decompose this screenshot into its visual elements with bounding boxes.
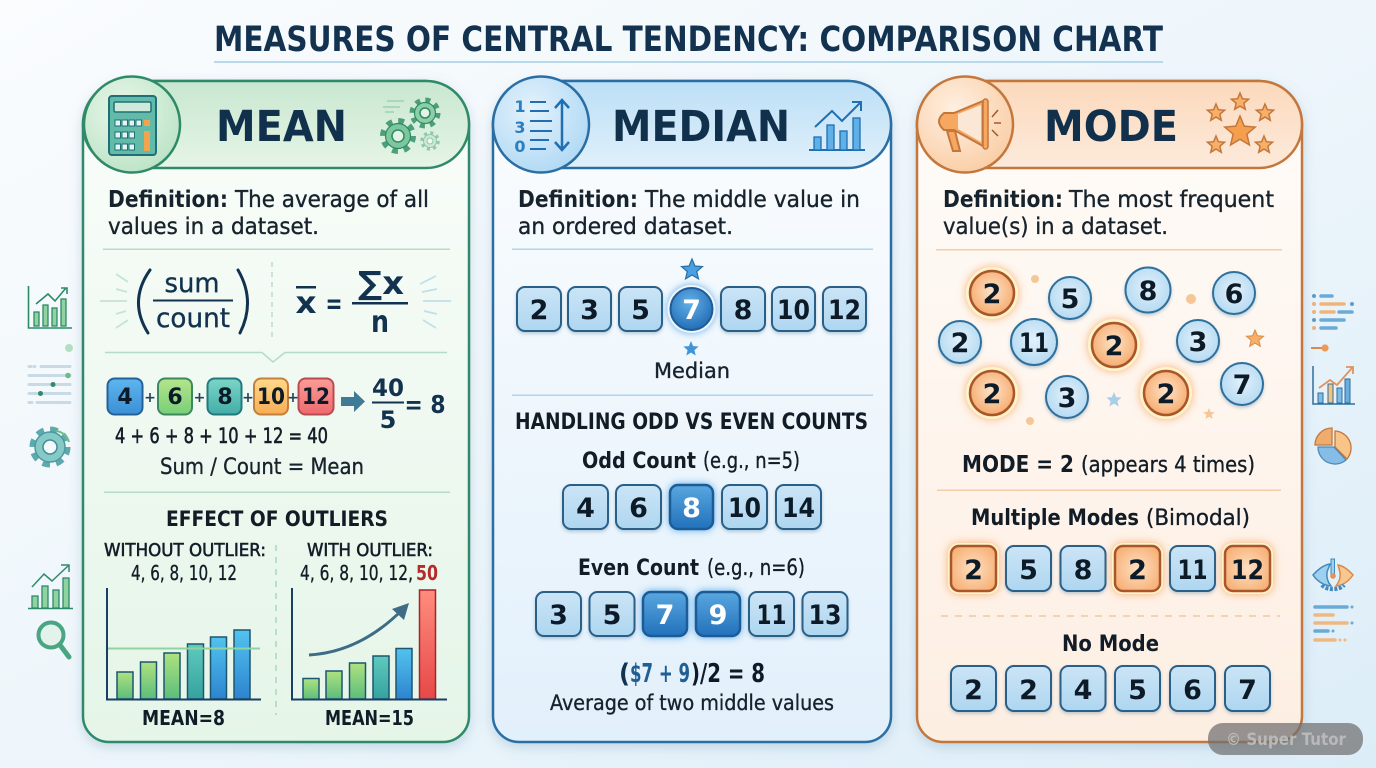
number row: odd count: 8 [682,493,701,524]
icon: gears [383,100,438,151]
subheading: multiple modes: (Bimodal) [1146,506,1250,531]
definition: median: Definition: [518,187,638,213]
left side icons [28,286,73,657]
sum tiles row: 8 [217,385,233,410]
fraction result: 5 [380,406,396,434]
text: with outlier: 4, 6, 8, 10, 12, [300,561,413,585]
panel body [917,81,1302,742]
icon: star above median [682,259,702,279]
highlighted median value [668,285,716,333]
number row: bimodal: 8 [1074,555,1092,586]
number row: ordered data: 8 [734,295,752,326]
formula: average of two middle [619,659,765,689]
number row: even count: 13 [808,600,842,631]
number row: ordered data: 12 [828,295,861,326]
number row: even count: 9 [709,600,727,631]
formula: word form: count [156,303,230,334]
number row: bimodal: 11 [1178,555,1208,586]
label: median: Median [654,359,730,383]
formula: symbols: x [296,286,316,321]
icon: pie chart [1315,428,1351,464]
sum tiles row [108,378,334,414]
sum tiles row: 12 [302,385,330,410]
text: without outlier: 4, 6, 8, 10, 12 [131,561,237,585]
icon: calculator [84,76,180,172]
number row: even count: 11 [756,600,786,631]
sum tiles row: 4 [117,385,133,410]
icon: side chart [1313,366,1355,404]
heading: mean: MEAN [216,102,347,152]
bubble: orange 2s: 2 [1105,331,1123,362]
number row: bimodal: 2 [1128,555,1147,586]
icon: ordered list: 3 [514,118,526,137]
definition: median [518,187,860,240]
number row: no mode: 6 [1183,675,1202,706]
sum tiles row: 6 [167,385,183,410]
bubble: blue values: 3 [1058,383,1076,414]
icon: eye with gear [1313,559,1353,589]
bubble: blue values: 5 [1061,284,1079,315]
definition: mean [108,187,429,240]
number row: no mode: 5 [1128,675,1147,706]
formula: word form [100,268,248,334]
bar chart: without outlier [107,588,261,700]
formula: word form: sum [164,268,220,299]
formula: symbols: = [326,287,342,320]
bubble: blue values: 8 [1139,276,1157,307]
number row: even count [536,592,848,636]
heading: median: MEDIAN [612,102,790,152]
number row: odd count: 10 [728,493,761,524]
subheading: even count: (e.g., n=6) [707,556,805,581]
result: mode equals 2: (appears 4 times) [1081,453,1255,478]
fraction result: 40 [372,374,404,402]
definition: mode [943,187,1274,240]
fraction result [372,374,446,434]
icon: megaphone [917,76,1013,172]
number row: bimodal: 2 [964,555,983,586]
subheading: odd count [582,449,800,474]
title: MEASURES OF CENTRAL TENDENCY: COMPARISON CHART [214,20,1163,60]
definition: mean: Definition: [108,187,228,213]
icon: side chart bottom [28,565,73,608]
number row: odd count: 14 [782,493,815,524]
number row: even count: 5 [603,600,621,631]
definition: median: The middle value in [644,187,860,213]
header band [83,81,469,168]
header band [917,81,1302,168]
text: without outlier [104,540,266,585]
number row: no mode [951,666,1270,711]
number row: ordered data: 5 [631,295,650,326]
subheading: multiple modes [971,506,1250,531]
decorative data cloud [939,267,1264,425]
highlighted median value: 7 [682,295,701,326]
number row: bimodal: 12 [1231,555,1264,586]
text: without outlier: WITHOUT OUTLIER: [104,540,266,561]
number row: even count: 3 [549,600,568,631]
icon: side data lines [29,344,73,402]
caption: Average of two middle values [550,691,834,716]
bubble: orange 2s: 2 [983,379,1001,410]
arrow: mean shift [309,603,409,655]
definition: mode: value(s) in a dataset. [943,214,1168,240]
icon: side chart top [28,286,72,328]
icon: side lines bottom [1315,606,1354,642]
subheading: even count: Even Count [578,556,699,581]
bubble: blue values: 3 [1189,327,1207,358]
panel body [493,81,891,742]
icon: magnifier [38,622,69,657]
icon: stars [1207,93,1274,152]
result: mode equals 2 [962,452,1255,478]
bubble: blue values: 2 [951,328,969,359]
subheading: multiple modes: Multiple Modes [971,506,1139,531]
definition: mode: Definition: [943,187,1063,213]
formula: symbols: ∑x [358,264,404,302]
sum tiles row: + [194,390,205,406]
bubble: orange 2s: 2 [983,279,1001,310]
sum equation: 4 + 6 + 8 + 10 + 12 = 40 [115,424,328,448]
watermark: © Super Tutor [1226,730,1347,750]
result: mode equals 2: MODE = 2 [962,452,1074,478]
number row: no mode: 7 [1238,675,1257,706]
number row: ordered data: 10 [777,295,810,326]
icon: side gear [32,430,69,464]
header band [493,81,891,168]
bubble: blue values [939,268,1263,418]
label: mean 15: MEAN=15 [325,706,414,730]
bubble: blue values: 7 [1233,370,1251,401]
number row: ordered data [517,285,866,333]
icon: side list lines [1312,294,1354,330]
number row: odd count: 4 [576,493,595,524]
heading: effect of outliers: EFFECT OF OUTLIERS [166,507,388,531]
number row: bimodal [948,543,1273,594]
panel: median [493,76,891,742]
subheading: odd count: (e.g., n=5) [703,449,800,474]
bubble: blue values: 11 [1019,328,1049,359]
panel body [83,81,469,742]
bubble: blue values: 6 [1225,279,1243,310]
sum tiles row: + [242,390,254,406]
sum tiles row: + [287,390,299,406]
fraction result: = 8 [404,390,446,419]
sum tiles row: + [144,390,156,406]
icon: star below median [683,341,699,355]
definition: median: an ordered dataset. [518,214,733,240]
text: with outlier: WITH OUTLIER: [307,540,433,561]
watermark [1208,723,1363,755]
number row: no mode: 2 [1019,675,1038,706]
number row: odd count: 6 [629,493,648,524]
number row: even count: 7 [656,600,674,631]
panel: mean [83,76,469,742]
number row: ordered data: 3 [580,295,599,326]
heading: mode: MODE [1044,102,1178,152]
arrow [341,391,365,412]
bubble: orange 2s [966,267,1192,419]
icon: side pin [1311,344,1329,352]
text: with outlier [300,540,438,585]
number row: odd count [563,485,821,529]
number row: ordered data: 2 [530,295,548,326]
icon: ordered list: 1 [514,97,526,116]
subheading: no mode: No Mode [1062,632,1159,657]
icon: ordered list [493,76,589,172]
bubble: orange 2s: 2 [1157,379,1175,410]
text: with outlier: 50 [416,561,438,585]
formula: average of two middle: $7 + 9 [630,659,690,689]
definition: mode: The most frequent [1068,187,1274,213]
formula: symbols: n [371,305,389,340]
formula: average of two middle: ( [619,659,630,689]
sum label: Sum / Count = Mean [160,455,364,480]
label: mean 8: MEAN=8 [142,706,225,730]
subheading: even count [578,556,805,581]
heading: odd vs even: HANDLING ODD VS EVEN COUNTS [515,410,868,435]
number row: no mode: 2 [964,675,983,706]
formula: average of two middle: )/2 = 8 [691,659,765,689]
bar chart: with outlier [292,588,447,700]
formula: symbols [296,264,451,340]
definition: mean: values in a dataset. [108,214,319,240]
icon: rising chart [809,102,865,150]
subheading: odd count: Odd Count [582,449,696,474]
panel: mode [917,76,1302,742]
icon: ordered list: 0 [514,137,526,156]
number row: no mode: 4 [1074,675,1092,706]
number row: bimodal: 5 [1019,555,1038,586]
right side icons [1311,294,1355,642]
definition: mean: The average of all [234,187,429,213]
sum tiles row: 10 [257,385,285,410]
